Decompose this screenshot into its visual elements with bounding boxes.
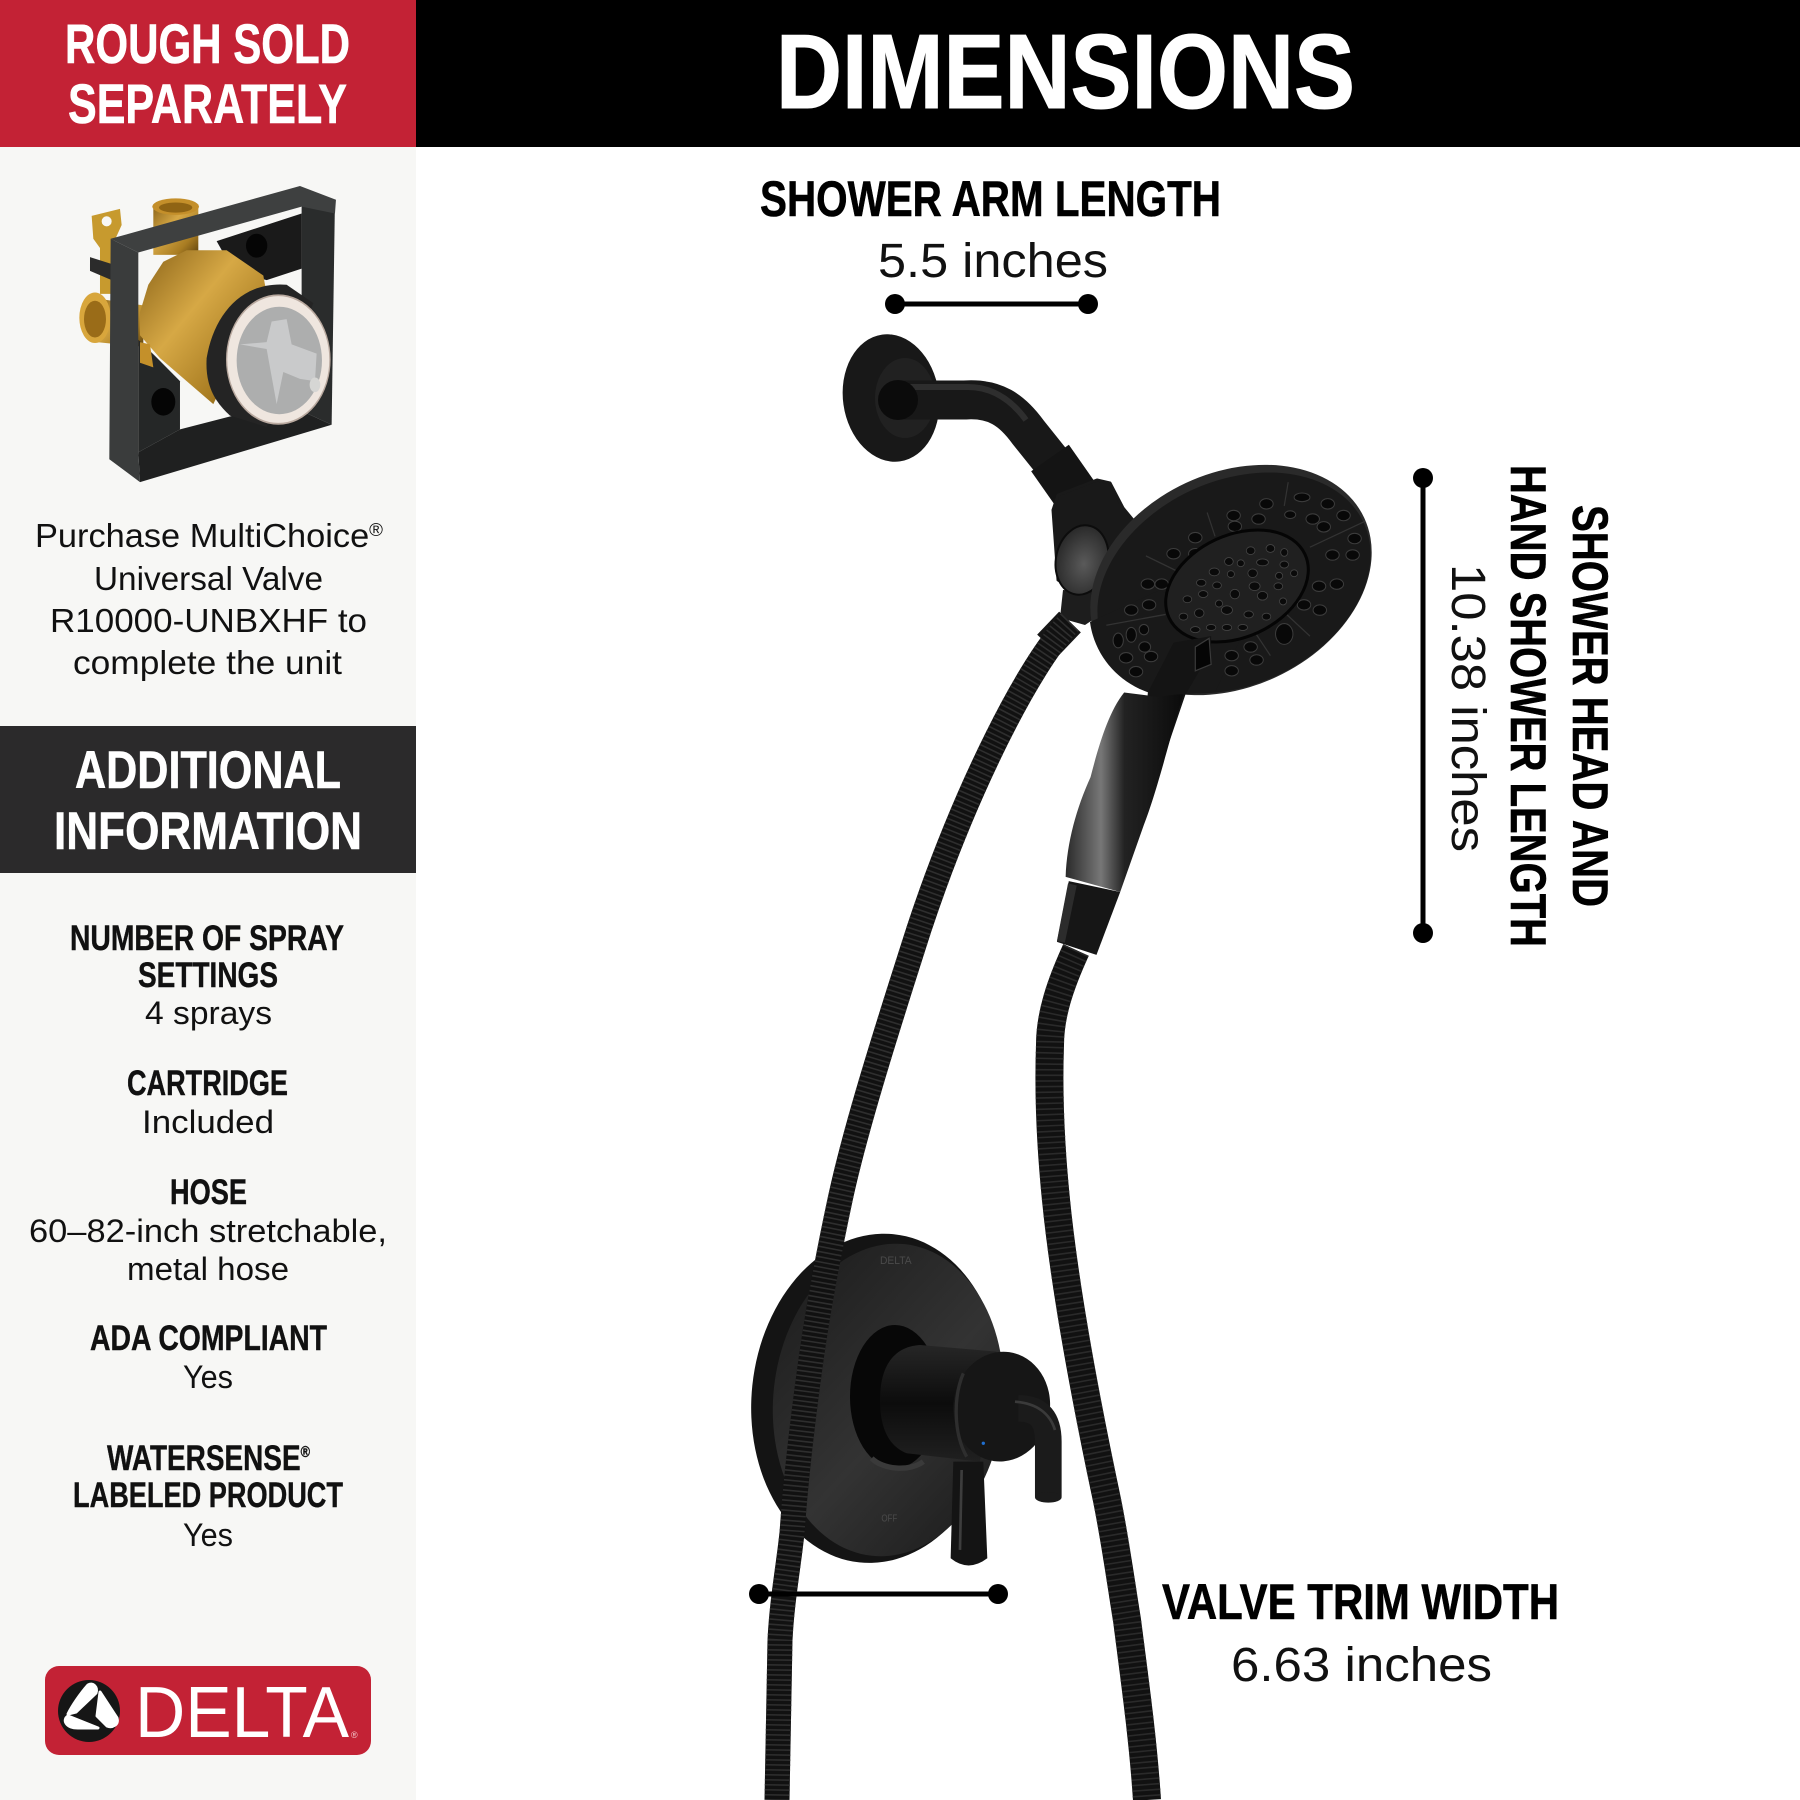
spec: number of spray settings: SETTINGS bbox=[138, 956, 278, 995]
product: hose to shower arm bbox=[777, 622, 1070, 1800]
label: shower head and hand shower length: HAND SHOWER LENGTH bbox=[1500, 465, 1556, 947]
label: valve trim width bbox=[1162, 1574, 1559, 1692]
spec: hose: 60–82-inch stretchable, bbox=[29, 1213, 387, 1249]
rough valve description: R10000-UNBXHF to bbox=[50, 602, 367, 639]
spec: number of spray settings bbox=[70, 919, 344, 1031]
rough valve description: Purchase MultiChoice bbox=[35, 517, 356, 554]
shower head inner spray face bbox=[1179, 545, 1298, 633]
label: shower head and hand shower length: 10.38 inches bbox=[1441, 564, 1494, 852]
dimension line: shower arm bbox=[885, 294, 1098, 314]
rough-in valve image bbox=[79, 186, 336, 482]
logo: delta: DELTA bbox=[135, 1673, 349, 1753]
spec: watersense labeled product: Yes bbox=[183, 1517, 233, 1553]
spec: cartridge: CARTRIDGE bbox=[127, 1064, 288, 1103]
spec: cartridge: Included bbox=[142, 1104, 274, 1140]
spec: cartridge bbox=[127, 1064, 288, 1140]
spec: watersense labeled product: LABELED PRODUCT bbox=[73, 1476, 343, 1515]
rough valve description: complete the unit bbox=[73, 644, 342, 681]
title banner: dimensions bbox=[416, 0, 1800, 147]
spec: hose: HOSE bbox=[170, 1173, 247, 1212]
label: shower head and hand shower length: SHOWER HEAD AND bbox=[1562, 505, 1618, 907]
logo: delta: ® bbox=[351, 1730, 358, 1740]
spec: watersense labeled product bbox=[73, 1439, 343, 1553]
banner: rough sold separately: ROUGH SOLD bbox=[65, 12, 350, 75]
product: valve trim bbox=[735, 1221, 1062, 1575]
title banner: dimensions: DIMENSIONS bbox=[776, 13, 1355, 131]
rough valve description: Universal Valve bbox=[94, 560, 323, 597]
banner: rough sold separately: SEPARATELY bbox=[68, 72, 347, 135]
label: valve trim width: VALVE TRIM WIDTH bbox=[1162, 1574, 1559, 1630]
spec: ada compliant: ADA COMPLIANT bbox=[90, 1319, 327, 1358]
spec: number of spray settings: 4 sprays bbox=[145, 995, 272, 1031]
sidebar background bbox=[0, 0, 416, 1800]
product: valve trim: DELTA bbox=[880, 1255, 913, 1267]
label: shower arm length: SHOWER ARM LENGTH bbox=[760, 171, 1221, 227]
spec: watersense labeled product: ® bbox=[301, 1444, 310, 1461]
label: shower arm length: 5.5 inches bbox=[878, 235, 1108, 288]
spec: ada compliant bbox=[90, 1319, 327, 1395]
logo: delta bbox=[45, 1666, 371, 1755]
rough valve description: ® bbox=[369, 520, 383, 540]
product: shower head bbox=[1049, 421, 1409, 739]
product: hose from hand shower bbox=[1049, 950, 1147, 1800]
product: valve trim: OFF bbox=[881, 1514, 897, 1525]
shower head nozzles bbox=[1106, 482, 1365, 677]
spec: watersense labeled product: WATERSENSE bbox=[107, 1439, 349, 1478]
spec: hose: metal hose bbox=[127, 1251, 289, 1287]
spec: hose bbox=[29, 1173, 387, 1287]
banner: rough sold separately bbox=[0, 0, 416, 147]
heading: additional information bbox=[0, 726, 416, 873]
spec: ada compliant: Yes bbox=[183, 1359, 233, 1395]
label: shower arm length bbox=[760, 171, 1221, 288]
dimension line: shower head length bbox=[1413, 468, 1433, 943]
dimension line: valve trim width bbox=[749, 1584, 1008, 1604]
heading: additional information: ADDITIONAL bbox=[75, 741, 341, 800]
product: shower arm and flange bbox=[835, 328, 1078, 498]
label: shower head and hand shower length bbox=[1441, 465, 1618, 947]
product: hand shower handle bbox=[1057, 636, 1211, 955]
heading: additional information: INFORMATION bbox=[54, 802, 362, 861]
rough valve description bbox=[35, 517, 383, 681]
label: valve trim width: 6.63 inches bbox=[1231, 1639, 1492, 1692]
spec: number of spray settings: NUMBER OF SPRAY bbox=[70, 919, 344, 958]
